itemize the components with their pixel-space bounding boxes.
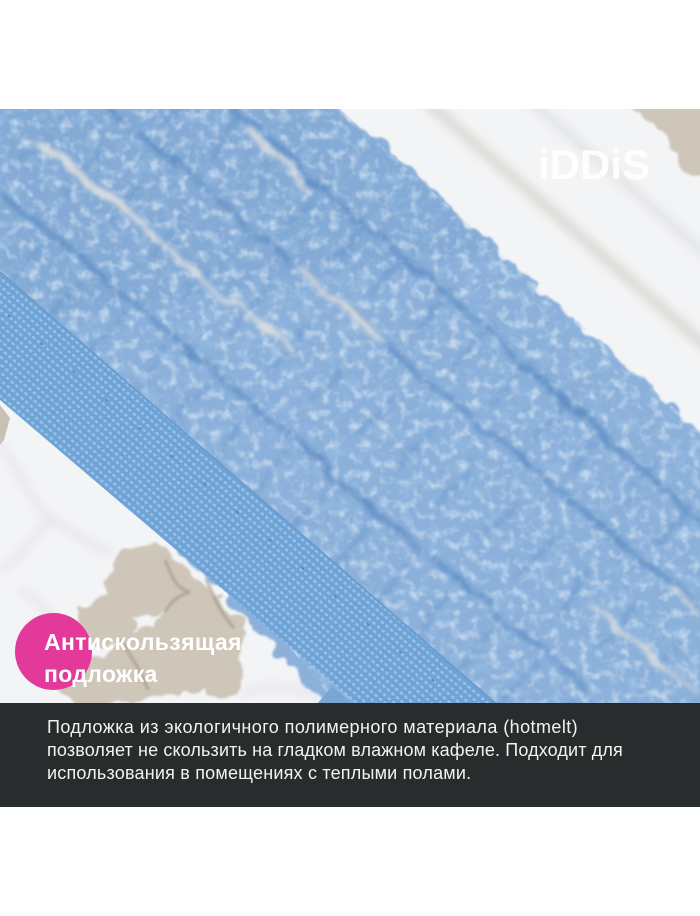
description text: [47, 717, 623, 783]
woven anti-slip strap: [0, 272, 495, 703]
heading: [44, 629, 242, 687]
description band: [0, 703, 700, 807]
cross-wise folds on strands: [9, 109, 700, 703]
white puffs shading, bottom left: [0, 445, 330, 700]
white chenille background: [0, 109, 700, 703]
beige corner, top right: [605, 60, 700, 200]
darker upper-left tone: [340, 110, 474, 231]
beige blobs, bottom left: [52, 542, 245, 706]
heading: подложка: [44, 661, 158, 687]
pink circle accent: [15, 613, 92, 690]
blue scrap at strap foot: [318, 686, 352, 703]
separators between strands: [0, 109, 700, 696]
mottled grain on blue: [0, 109, 700, 703]
shadow lines in white strands, top right: [425, 100, 700, 350]
logo: iDDiS: [538, 141, 650, 188]
blue chenille field: [0, 40, 700, 760]
beige scrap, left edge: [0, 405, 10, 445]
creases in beige blobs: [120, 560, 234, 690]
description text: позволяет не скользить на гладком влажном кафеле. Подходит для: [47, 740, 623, 760]
heading: Антискользящая: [44, 629, 242, 655]
light gaps between strands: [40, 130, 700, 695]
photo: chenille bath mat with blue strands and anti-slip strap: [0, 109, 700, 703]
description text: Подложка из экологичного полимерного материала (hotmelt): [47, 717, 578, 737]
description text: использования в помещениях с теплыми полами.: [47, 763, 471, 783]
